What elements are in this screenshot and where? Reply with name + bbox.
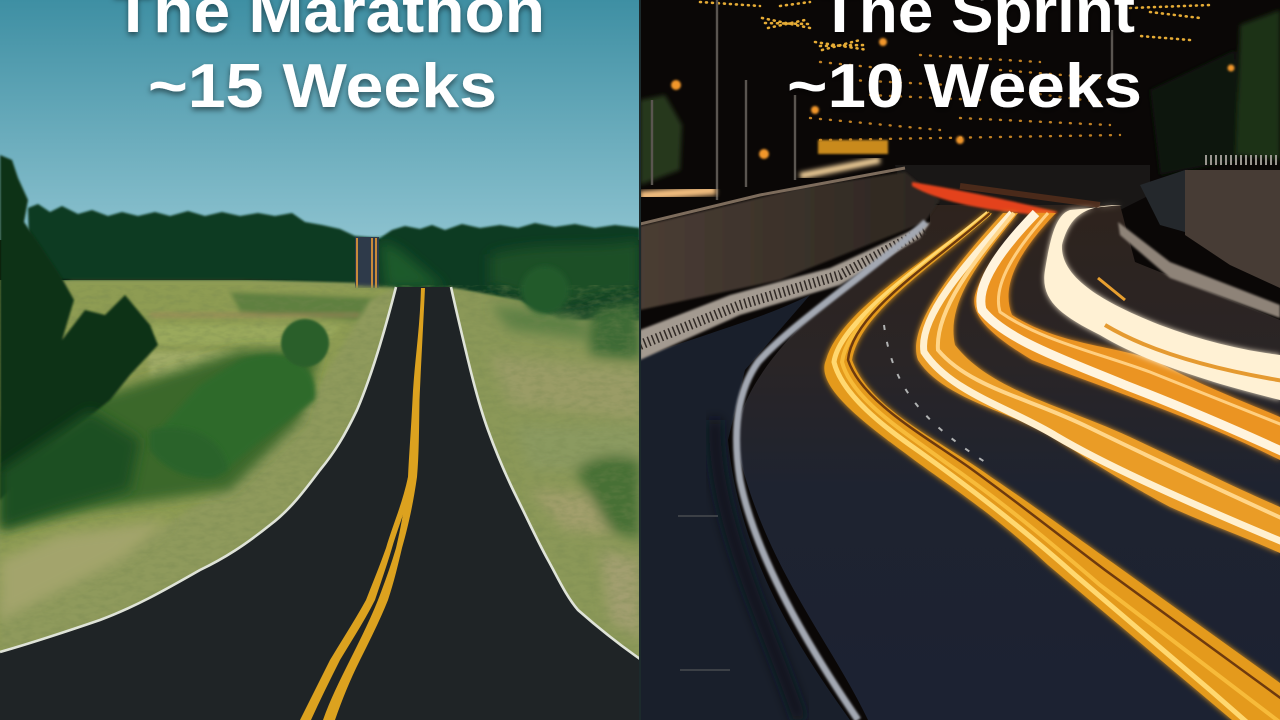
distant tree line xyxy=(28,204,640,320)
road xyxy=(0,287,640,720)
retaining wall right xyxy=(1118,160,1280,318)
sky xyxy=(0,0,640,240)
duration: ~10 Weeks xyxy=(787,52,1142,121)
shoulder xyxy=(640,295,850,720)
panel: the marathon xyxy=(0,0,640,720)
road edge white line xyxy=(737,222,926,720)
duration: ~15 Weeks xyxy=(148,52,497,121)
left trees and shrubs xyxy=(0,155,329,620)
far road lights xyxy=(641,138,890,197)
double yellow centre line xyxy=(323,288,425,720)
roadside verge left xyxy=(0,288,396,650)
divider between panels xyxy=(639,0,641,720)
trees xyxy=(640,10,1280,185)
panel: the sprint xyxy=(640,0,1280,720)
retaining wall left xyxy=(640,168,940,360)
right field xyxy=(490,300,640,640)
red tail light trail xyxy=(912,182,1058,216)
heading: the sprint xyxy=(787,0,1142,121)
road surface xyxy=(736,205,1280,720)
heading: the marathon xyxy=(113,0,545,121)
overpass bridge xyxy=(895,165,1150,210)
ground base xyxy=(0,280,639,657)
lane dashes xyxy=(884,325,985,462)
left field xyxy=(68,278,396,378)
light trail 3 xyxy=(974,213,1280,460)
light trail 2 xyxy=(916,213,1280,553)
distant road xyxy=(355,237,379,288)
light trail 1 xyxy=(824,213,1280,720)
night background xyxy=(640,0,1280,720)
city lights xyxy=(700,2,1210,140)
road edge lines xyxy=(0,287,396,652)
right field tree clump xyxy=(521,266,569,314)
light trail 4 xyxy=(1044,205,1280,400)
street lamps xyxy=(652,0,1234,200)
field texture xyxy=(0,285,640,650)
